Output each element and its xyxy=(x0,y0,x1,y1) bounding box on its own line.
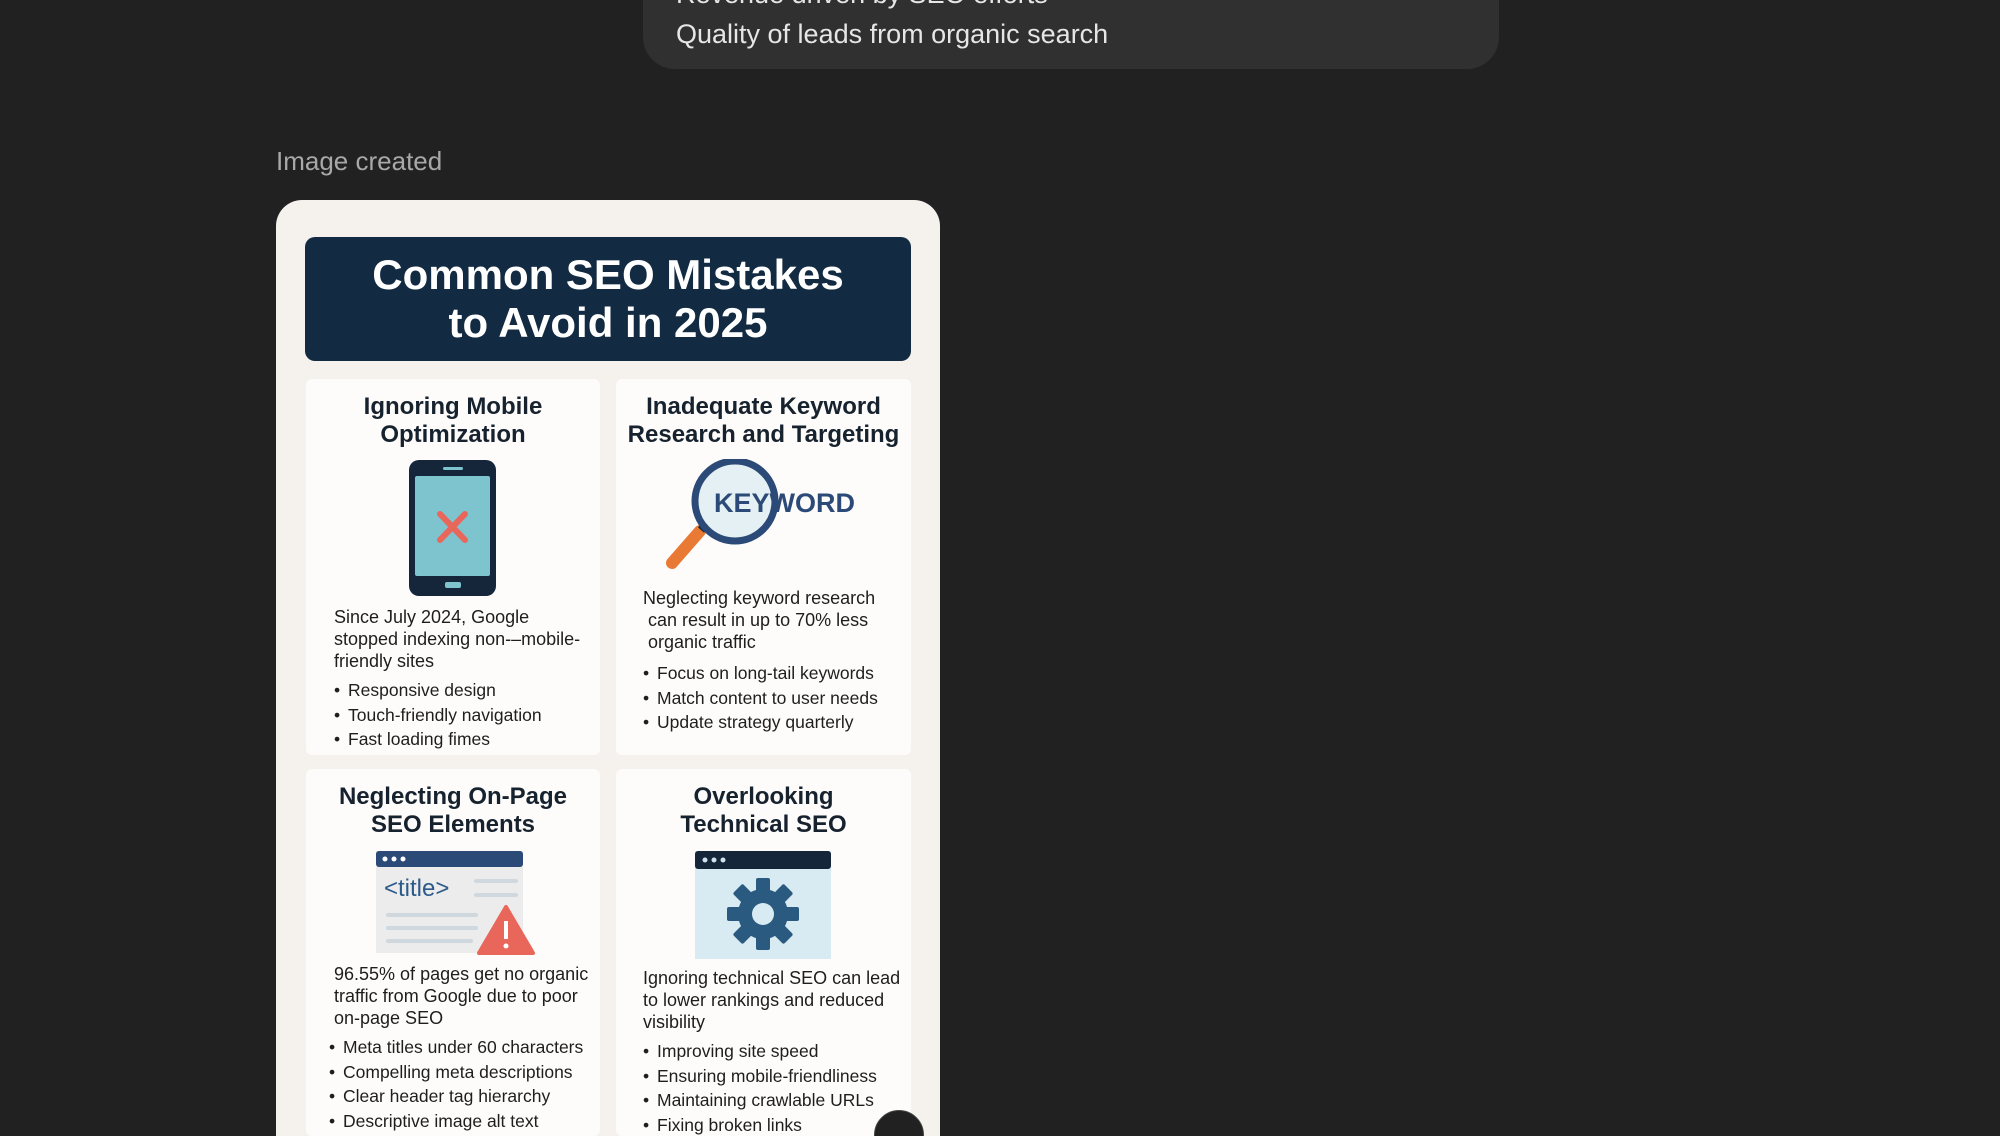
icon: magnifier keyword: KEYWORD xyxy=(714,488,855,518)
panel: mobile: Ignoring Mobile xyxy=(364,393,542,420)
panel: on-page xyxy=(306,769,600,1136)
panel: keyword: Inadequate Keyword xyxy=(646,393,881,420)
panel: keyword xyxy=(616,379,911,755)
chat bubble: Quality of leads from organic search xyxy=(676,19,1108,49)
panel: on-page: Meta titles under 60 characters xyxy=(343,1037,583,1057)
panel: on-page: Clear header tag hierarchy xyxy=(343,1086,550,1106)
title: Common SEO Mistakes xyxy=(372,251,844,298)
panel: on-page: Neglecting On-Page xyxy=(339,783,567,810)
icon: gear browser xyxy=(695,851,831,959)
icon: title browser warning xyxy=(376,851,536,955)
panel: keyword: can result in up to 70% less xyxy=(648,610,868,630)
panel: mobile: Since July 2024, Google stopped indexing non-–mobile-friendly sites xyxy=(334,607,580,671)
panel: mobile: Responsive design xyxy=(348,680,496,700)
panel: technical: Technical SEO xyxy=(680,811,847,838)
panel: keyword: organic traffic xyxy=(648,632,756,652)
icon: magnifier keyword xyxy=(666,459,855,569)
icon: title browser warning: <title> xyxy=(384,875,449,902)
panel: mobile: Fast loading fimes xyxy=(348,729,490,749)
panel: on-page: SEO Elements xyxy=(371,811,535,838)
panel: technical: Maintaining crawlable URLs xyxy=(657,1090,874,1110)
panel: on-page: 96.55% of pages get no organic traffic from Google due to poor on-page SEO xyxy=(334,964,588,1028)
chat bubble xyxy=(643,0,1499,69)
label: image created: Image created xyxy=(276,146,442,176)
title xyxy=(305,237,911,361)
icon: phone xyxy=(409,460,496,596)
panel: keyword: Match content to user needs xyxy=(657,688,878,708)
panel: mobile: Touch-friendly navigation xyxy=(348,704,542,724)
panel: keyword: Research and Targeting xyxy=(628,421,899,448)
infographic card xyxy=(276,200,940,1136)
panel: technical: Improving site speed xyxy=(657,1041,818,1061)
panel: mobile: Optimization xyxy=(380,421,526,448)
panel: technical: Ignoring technical SEO can lead to lower rankings and reduced visibility xyxy=(643,968,900,1032)
panel: on-page: Compelling meta descriptions xyxy=(343,1062,573,1082)
title: to Avoid in 2025 xyxy=(449,299,767,346)
panel: keyword: Focus on long-tail keywords xyxy=(657,663,874,683)
panel: technical: Ensuring mobile-friendliness xyxy=(657,1066,877,1086)
panel: technical: Overlooking xyxy=(693,783,834,810)
panel: mobile xyxy=(306,379,600,755)
panel: keyword: Update strategy quarterly xyxy=(657,712,854,732)
panel: keyword: Neglecting keyword research xyxy=(643,588,875,608)
panel: technical xyxy=(616,769,911,1136)
panel: technical: Fixing broken links xyxy=(657,1114,802,1134)
scroll button xyxy=(874,1110,924,1136)
panel: on-page: Descriptive image alt text xyxy=(343,1110,538,1130)
